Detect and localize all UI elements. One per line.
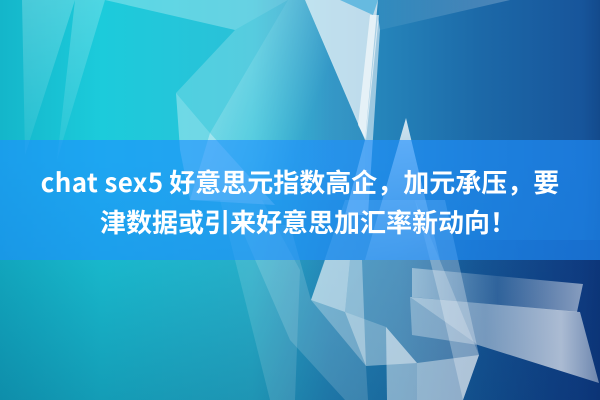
headline text: 津数据或引来好意思加汇率新动向！	[100, 203, 516, 240]
title band	[0, 140, 600, 260]
headline text	[41, 163, 559, 240]
headline text: chat sex5 好意思元指数高企，加元承压，要	[41, 163, 559, 200]
